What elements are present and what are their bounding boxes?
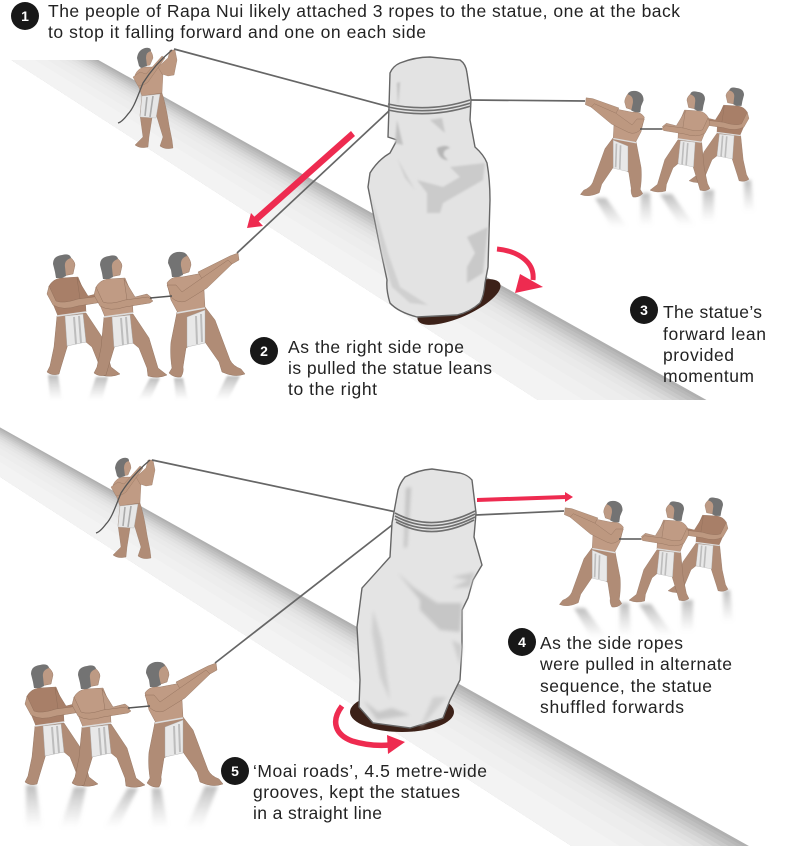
badge 2	[250, 337, 278, 365]
badge 5: 5	[231, 763, 239, 779]
step 4 text	[508, 628, 732, 717]
red arrow: pull direction	[247, 131, 355, 228]
caption 2: As the right side rope	[288, 337, 464, 357]
badge 1: 1	[21, 8, 29, 24]
badge 4: 4	[518, 634, 526, 650]
person holding rear rope	[96, 458, 155, 559]
caption 4: were pulled in alternate	[539, 654, 732, 674]
person holding rear rope	[118, 48, 177, 149]
red arrow: statue rotation	[336, 706, 405, 754]
caption 4	[539, 633, 732, 717]
step 2 text	[250, 337, 492, 399]
caption 5: ‘Moai roads’, 4.5 metre-wide	[253, 761, 487, 781]
caption 3: provided	[663, 345, 734, 365]
step 1 text	[11, 1, 680, 42]
caption 4: As the side ropes	[540, 633, 683, 653]
caption 5	[253, 761, 487, 823]
caption 4: shuffled forwards	[540, 697, 684, 717]
hole beneath statue	[350, 692, 454, 732]
group of three people pulling right rope	[580, 88, 754, 228]
group of three people pulling right rope	[559, 498, 733, 638]
caption 2	[288, 337, 492, 399]
caption 1	[48, 1, 680, 42]
panel: top scene, statue leaning right	[11, 1, 766, 400]
hole beneath statue	[412, 270, 506, 334]
rope band	[395, 511, 475, 532]
red arrow: pull direction	[477, 492, 573, 502]
ropes	[174, 49, 585, 253]
caption 2: to the right	[288, 379, 377, 399]
caption 5: in a straight line	[253, 803, 382, 823]
step 3 text	[630, 296, 766, 386]
group of three people pulling left rope	[47, 252, 245, 400]
caption 3: forward lean	[663, 324, 766, 344]
badge 3: 3	[640, 302, 648, 318]
badge 5	[221, 757, 249, 785]
badge 4	[508, 628, 536, 656]
group of three people pulling left rope	[25, 662, 223, 828]
road groove	[11, 60, 706, 400]
badge 2: 2	[260, 343, 268, 359]
red arrow: statue rotation	[497, 249, 543, 293]
caption 2: is pulled the statue leans	[288, 358, 492, 378]
caption 1: to stop it falling forward and one on each side	[48, 22, 426, 42]
caption 3	[663, 302, 766, 386]
moai statue wrapped in ropes	[357, 469, 482, 728]
caption 3: momentum	[663, 366, 754, 386]
caption 1: The people of Rapa Nui likely attached 3 ropes to the statue, one at the back	[48, 1, 680, 21]
rope band	[388, 100, 471, 114]
ropes	[152, 460, 564, 663]
caption 4: sequence, the statue	[540, 676, 712, 696]
caption 5: grooves, kept the statues	[253, 782, 460, 802]
step 5 text	[221, 757, 487, 823]
panel: bottom scene, statue shuffling forward	[0, 427, 749, 846]
moai statue wrapped in ropes	[368, 57, 490, 317]
road groove	[0, 427, 749, 846]
badge 1	[11, 2, 39, 30]
caption 3: The statue’s	[663, 302, 762, 322]
